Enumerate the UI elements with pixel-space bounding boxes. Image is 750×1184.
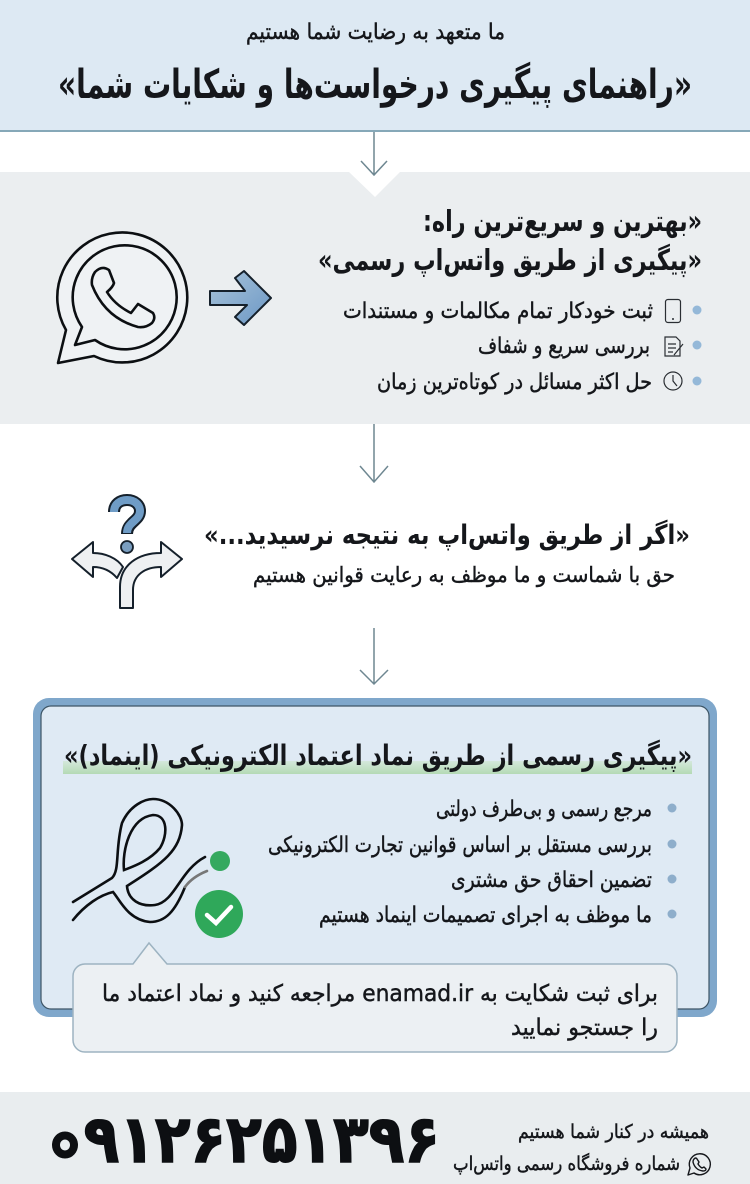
- arrow: panel to fallback: [360, 424, 388, 482]
- icon: question and fork: [72, 500, 182, 608]
- callout: را جستجو نمایید: [511, 1015, 658, 1041]
- phone number zero ring: [56, 1136, 74, 1154]
- bullet 2: بررسی سریع و شفاف: [478, 334, 650, 359]
- bullet list: enamad: ما موظف به اجرای تصمیمات اینماد هستیم: [319, 903, 652, 928]
- panel: enamad: [33, 698, 717, 1052]
- footer band: [0, 1092, 750, 1184]
- panel: whatsapp recommended: [0, 172, 750, 424]
- footer line 2: شماره فروشگاه رسمی واتس‌اپ: [453, 1152, 680, 1175]
- callout: برای ثبت شکایت به enamad.ir مراجعه کنید و نماد اعتماد ما: [102, 981, 658, 1007]
- footer line 1: همیشه در کنار شما هستیم: [518, 1121, 709, 1143]
- whatsapp heading: [318, 204, 702, 278]
- fallback subtitle: حق با شماست و ما موظف به رعایت قوانین هستیم: [253, 563, 675, 588]
- bullet 3: حل اکثر مسائل در کوتاه‌ترین زمان: [377, 370, 652, 395]
- phone number: ۰۹۱۲۶۲۵۱۳۹۶: [48, 1101, 440, 1178]
- green highlight: [63, 761, 692, 774]
- bullet list: enamad: مرجع رسمی و بی‌طرف دولتی: [436, 797, 652, 822]
- header subtitle: ما متعهد به رضایت شما هستیم: [246, 20, 505, 45]
- icon: small whatsapp: [688, 1154, 710, 1175]
- icon: blue arrow: [210, 271, 271, 325]
- bullet list: whatsapp benefits: [343, 299, 702, 395]
- arrow: header to panel: [361, 132, 387, 175]
- icon: enamad signature: [73, 799, 243, 938]
- header band: [0, 0, 750, 132]
- bullet list: enamad: بررسی مستقل بر اساس قوانین تجارت الکترونیکی: [268, 833, 652, 858]
- bullet list: enamad: [268, 797, 676, 928]
- callout: [73, 943, 677, 1052]
- bullet 1: ثبت خودکار تمام مکالمات و مستندات: [343, 299, 653, 324]
- icon: whatsapp: [57, 232, 187, 363]
- arrow: fallback to enamad: [360, 628, 388, 684]
- bullet list: enamad: تضمین احقاق حق مشتری: [451, 868, 652, 893]
